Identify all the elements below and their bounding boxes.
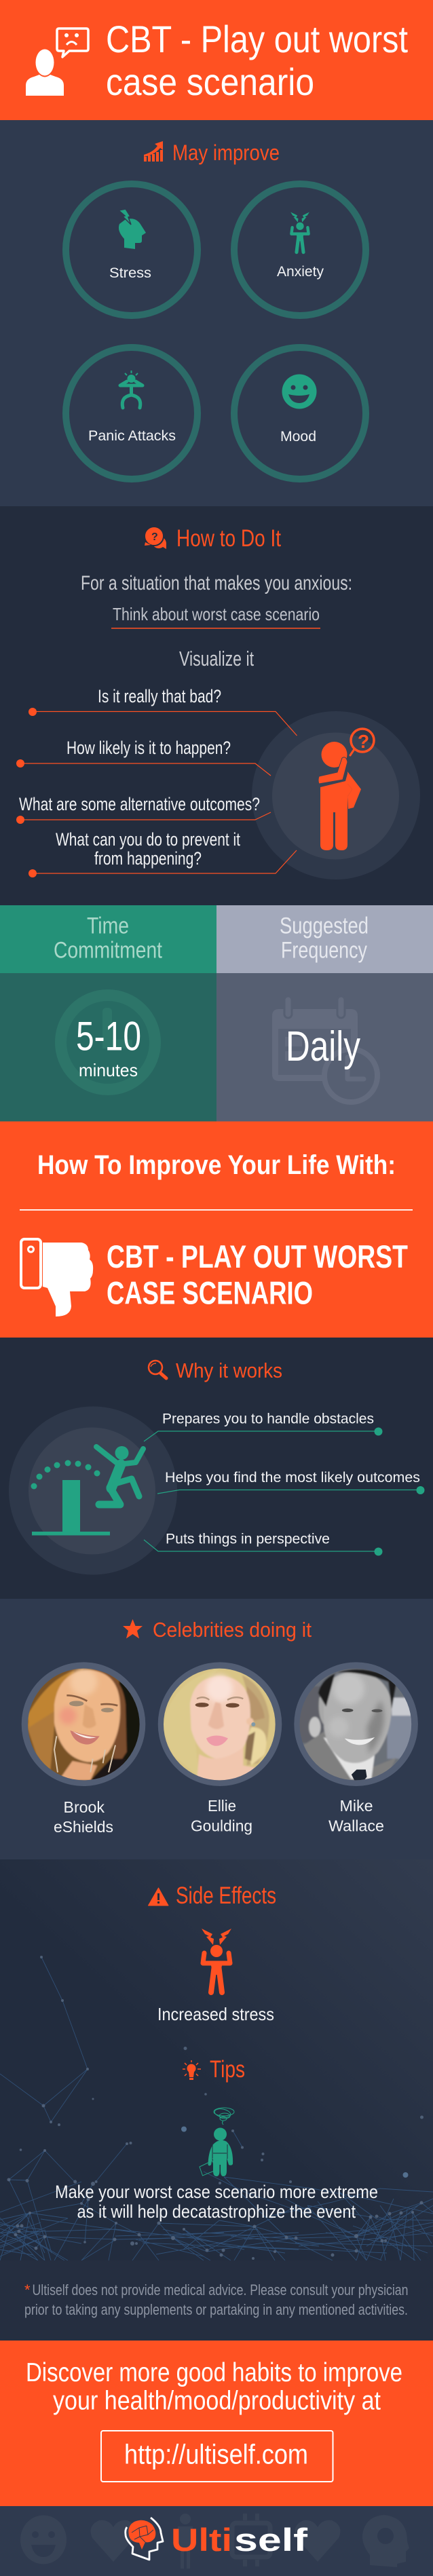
heading: suggested frequency: Frequency bbox=[281, 938, 367, 964]
photo: Brooke Shields bbox=[20, 1659, 147, 1786]
label: Ellie Goulding: Ellie bbox=[208, 1797, 236, 1815]
callout: prevent it: What can you do to prevent it bbox=[56, 829, 240, 850]
logo: Ultiself bbox=[126, 2518, 307, 2560]
photo: Mike Wallace bbox=[292, 1659, 419, 1786]
panel: how to improve banner bbox=[0, 1121, 433, 1338]
panel: why it works bbox=[0, 1338, 433, 1599]
icon: calendar and clock bbox=[272, 996, 377, 1102]
icon: warning triangle bbox=[148, 1888, 168, 1906]
callout: perspective bbox=[144, 1531, 383, 1555]
panel: header bbox=[0, 0, 433, 120]
callout: alternative outcomes: What are some alternative outcomes? bbox=[19, 794, 260, 814]
heading: may improve: May improve bbox=[172, 140, 280, 165]
icon: magnifier bbox=[149, 1361, 166, 1378]
callout: most likely outcomes bbox=[157, 1470, 425, 1494]
icon: person with sad speech bubble bbox=[26, 29, 88, 96]
icon: question speech bubbles bbox=[145, 527, 166, 549]
icon: question bubble bbox=[350, 729, 374, 755]
label: Mike Wallace: Mike bbox=[339, 1797, 373, 1815]
heading: suggested frequency: Suggested bbox=[280, 913, 369, 939]
heading: why it works: Why it works bbox=[176, 1359, 282, 1382]
label: stress: Stress bbox=[109, 265, 151, 281]
icon: smiling face bbox=[282, 375, 316, 409]
graphic: jumping figure bbox=[9, 1406, 177, 1574]
heading: time commitment: Time bbox=[87, 913, 129, 939]
callout: most likely outcomes: Helps you find the most likely outcomes bbox=[165, 1470, 420, 1485]
button: website link bbox=[101, 2431, 333, 2482]
text: situation intro: For a situation that makes you anxious: bbox=[81, 572, 352, 594]
heading: tips: Tips bbox=[210, 2056, 245, 2083]
callout: how likely bbox=[16, 738, 271, 776]
icon: question speech bubbles: ? bbox=[151, 531, 158, 543]
icon: person with backpack and tangled thoughts bbox=[200, 2108, 234, 2176]
wordmark: self bbox=[234, 2522, 307, 2558]
callout: alternative outcomes bbox=[16, 794, 271, 824]
icon: star bbox=[123, 1619, 143, 1638]
panel: time commitment bbox=[0, 905, 216, 1121]
panel: disclaimer bbox=[0, 2260, 433, 2341]
panel: footer bbox=[0, 2506, 433, 2576]
stress circle bbox=[66, 184, 197, 316]
anxiety circle bbox=[234, 184, 366, 316]
label: Ellie Goulding: Goulding bbox=[191, 1817, 252, 1835]
icon: brain head bbox=[126, 2518, 163, 2560]
callout: prevent it: from happening? bbox=[94, 848, 202, 869]
text: visualize it: Visualize it bbox=[179, 647, 254, 670]
icon: person thinking bbox=[318, 742, 361, 850]
label: minutes: minutes bbox=[79, 1060, 138, 1080]
label: panic attacks: Panic Attacks bbox=[88, 428, 176, 444]
icon: light bulb bbox=[183, 2060, 201, 2080]
value: 5-10: 5-10 bbox=[76, 1014, 141, 1059]
text: tip: Make your worst case scenario more extreme bbox=[55, 2182, 378, 2202]
panel: suggested frequency bbox=[216, 905, 433, 1121]
label: anxiety: Anxiety bbox=[277, 264, 324, 280]
icon: jumper bbox=[96, 1446, 143, 1504]
photo: Ellie Goulding bbox=[156, 1659, 283, 1786]
icon: obstacle bbox=[31, 1460, 110, 1535]
icon: rising bars with arrow bbox=[144, 141, 163, 162]
faint background icons bbox=[20, 2514, 409, 2569]
callout: perspective: Puts things in perspective bbox=[166, 1531, 330, 1547]
text: think about worst case: Think about worst case scenario bbox=[113, 604, 320, 624]
text: discover more: your health/mood/productivity at bbox=[53, 2386, 381, 2416]
callout: prepares you: Prepares you to handle obstacles bbox=[162, 1412, 374, 1426]
heading: how to improve: How To Improve Your Life With: bbox=[37, 1150, 396, 1180]
text: technique name: CASE SCENARIO bbox=[107, 1274, 313, 1311]
heading: time commitment: Commitment bbox=[54, 938, 162, 964]
callout: prevent it bbox=[29, 829, 297, 877]
graphic: thinking figure bbox=[252, 711, 420, 879]
value: daily: Daily bbox=[286, 1023, 360, 1070]
mood circle bbox=[234, 347, 366, 479]
panel: may improve bbox=[0, 120, 433, 506]
heading: how to do it: How to Do It bbox=[176, 525, 281, 552]
panic attacks circle bbox=[66, 347, 197, 479]
callout: prepares you bbox=[144, 1412, 383, 1441]
callout: how likely: How likely is it to happen? bbox=[67, 738, 231, 758]
heading: celebrities: Celebrities doing it bbox=[153, 1618, 312, 1642]
label: mood: Mood bbox=[280, 429, 316, 444]
panel: side effects and tips bbox=[0, 1859, 433, 2260]
icon: panic figure bbox=[120, 371, 143, 408]
icon: question bubble: ? bbox=[358, 731, 369, 752]
heading: side effects: Side Effects bbox=[176, 1882, 276, 1909]
text: tip: as it will help decatastrophize the event bbox=[77, 2201, 356, 2222]
icon: stress head bbox=[119, 209, 146, 249]
icon: anxious figure bbox=[290, 212, 309, 252]
callout: is it really that bad bbox=[29, 686, 297, 736]
icon: clock bbox=[61, 995, 155, 1090]
text: disclaimer: * bbox=[24, 2281, 31, 2298]
title: case scenario bbox=[106, 60, 314, 103]
label: Brook eShields: eShields bbox=[54, 1818, 113, 1836]
callout: is it really that bad: Is it really that bad? bbox=[98, 686, 221, 706]
icon: stressed figure bbox=[202, 1929, 231, 1992]
icon: thumbs down bbox=[21, 1239, 93, 1317]
label: Mike Wallace: Wallace bbox=[328, 1817, 384, 1835]
panel: call to action bbox=[0, 2341, 433, 2506]
button: website link: http://ultiself.com bbox=[124, 2439, 308, 2470]
label: Brook eShields: Brook bbox=[64, 1798, 105, 1816]
panel: celebrities bbox=[22, 1619, 418, 1835]
panel: how to do it bbox=[0, 506, 433, 905]
text: increased stress: Increased stress bbox=[157, 2004, 274, 2024]
wordmark: Ulti bbox=[171, 2522, 232, 2558]
